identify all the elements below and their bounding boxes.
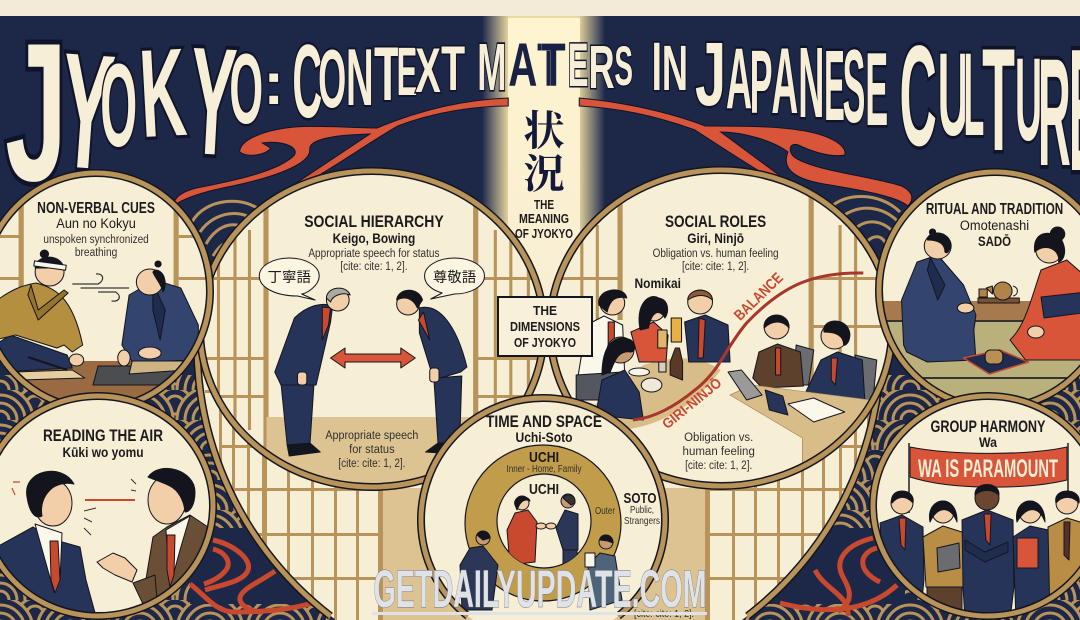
- heading: social roles: [cite: cite: 1, 2].: [682, 259, 749, 273]
- title: O: [229, 35, 263, 145]
- text: roles note: human feeling: [683, 444, 755, 458]
- label: outer uchi: [506, 449, 582, 475]
- label: soto: [624, 490, 660, 527]
- icon: wind lines: [72, 274, 129, 301]
- text: roles note: Obligation vs.: [684, 430, 753, 444]
- heading: group harmony: [930, 417, 1046, 450]
- title: C: [292, 22, 322, 139]
- figure: left man: [0, 471, 97, 620]
- heading: reading the air: [43, 426, 163, 460]
- center kanji and meaning label: 状: [524, 98, 566, 157]
- figure: woman in red: [631, 297, 668, 362]
- center glow banner: [482, 16, 605, 300]
- banner: wa is paramount: [908, 443, 1069, 513]
- title: U: [938, 29, 969, 160]
- title: S: [614, 36, 633, 98]
- ring: outer uchi: [465, 445, 621, 601]
- icon: perception lines: [12, 482, 135, 500]
- title: P: [750, 32, 772, 133]
- large outer ring arc: [197, 290, 881, 616]
- shoji backdrop inside large ring: [202, 357, 870, 620]
- text: clipped citation: [cite: cite: 1, 2].: [634, 609, 694, 620]
- title: L: [964, 29, 984, 161]
- heading: time and space: [486, 412, 602, 445]
- shoji lattice roles: [562, 197, 881, 384]
- center kanji and meaning label: THE: [534, 197, 554, 212]
- panel: non-verbal cues: [0, 169, 214, 402]
- title: A: [771, 29, 798, 134]
- heading: reading the air: Kūki wo yomu: [62, 444, 144, 460]
- heading: non-verbal cues: unspoken synchronized: [43, 232, 149, 246]
- heading: social hierarchy: [304, 211, 444, 273]
- heading: non-verbal cues: NON-VERBAL CUES: [37, 199, 155, 217]
- heading: social hierarchy: Keigo, Bowing: [333, 231, 415, 247]
- heading: social hierarchy: Appropriate speech for status: [308, 246, 440, 260]
- title: N: [662, 33, 688, 105]
- title: K: [136, 21, 189, 163]
- title: U: [1015, 33, 1042, 166]
- text: roles note: [683, 430, 755, 472]
- label: soto: SOTO: [624, 490, 657, 507]
- figure: left bowing man: [275, 288, 350, 456]
- arc: balance curve: [633, 273, 863, 420]
- text: roles note: [cite: cite: 1, 2].: [685, 458, 752, 472]
- title: E: [568, 32, 589, 100]
- icon: double arrow: [331, 348, 415, 368]
- label: outer uchi: UCHI: [529, 449, 559, 466]
- title: T: [537, 31, 562, 99]
- label: soto: Public,: [630, 505, 654, 516]
- box: the dimensions of jyokyo: OF JYOKYO: [514, 335, 576, 350]
- table: [18, 361, 158, 398]
- figure: meeting man navy: [806, 320, 878, 400]
- title: E: [397, 34, 417, 110]
- speech bubble right: [425, 258, 484, 299]
- label: inner uchi: UCHI: [529, 481, 559, 498]
- figure: woman in kimono: [1010, 227, 1080, 360]
- title: [5, 2, 1080, 222]
- title: N: [346, 33, 374, 123]
- title: R: [589, 33, 615, 101]
- panel: reading the air: [0, 392, 220, 620]
- panel: ritual and tradition: [875, 170, 1080, 415]
- floor: [266, 417, 470, 483]
- title: A: [508, 31, 537, 99]
- heading: ritual and tradition: SADŌ: [978, 232, 1011, 250]
- label: soto: Strangers: [624, 516, 660, 527]
- figure: uchi pair: [507, 494, 578, 565]
- shoji lattice non-verbal: [0, 205, 206, 288]
- icon: bottle and dishes: [629, 348, 683, 392]
- heading: social roles: Obligation vs. human feeling: [653, 246, 779, 260]
- box: the dimensions of jyokyo: THE: [533, 303, 557, 318]
- heading: non-verbal cues: [37, 199, 155, 259]
- title: T: [541, 31, 566, 99]
- center kanji and meaning label: 況: [524, 141, 564, 200]
- red swirl upper left: [174, 98, 508, 206]
- speech bubble right: 尊敬語: [433, 266, 476, 287]
- heading: reading the air: READING THE AIR: [43, 426, 163, 445]
- title: T: [982, 19, 1015, 182]
- title: Y: [185, 16, 240, 189]
- text: hierarchy note: for status: [349, 442, 395, 456]
- heading: group harmony: Wa: [979, 434, 997, 450]
- wave clusters upper: [192, 196, 902, 256]
- panel: time and space: [415, 395, 671, 620]
- shoji lattice hierarchy: [206, 206, 538, 449]
- label: nomikai: Nomikai: [635, 276, 681, 292]
- figure: team of five: [880, 484, 1080, 620]
- text: hierarchy note: Appropriate speech: [325, 428, 418, 442]
- heading: social roles: [653, 211, 779, 273]
- text: hierarchy note: [325, 428, 418, 470]
- text: hierarchy note: [cite: cite: 1, 2].: [338, 456, 405, 470]
- title: E: [865, 32, 888, 148]
- heading: ritual and tradition: [926, 200, 1063, 250]
- title: :: [263, 50, 284, 117]
- box: the dimensions of jyokyo: [498, 297, 592, 356]
- title: M: [477, 31, 507, 105]
- heading: social roles: Giri, Ninjō: [687, 231, 744, 247]
- center kanji and meaning label: [515, 98, 573, 241]
- panel: group harmony: [870, 392, 1080, 620]
- figure: right man: [97, 468, 215, 620]
- nomikai table and curve-side wash: [594, 358, 721, 429]
- title: O: [318, 32, 346, 125]
- label: outer uchi: Inner - Home, Family: [506, 464, 582, 475]
- figure: white shirt man: [576, 290, 627, 400]
- figure: seated man: [902, 229, 976, 362]
- title: T: [374, 33, 401, 117]
- heading: non-verbal cues: Aun no Kokyu: [56, 216, 136, 232]
- panel: social hierarchy: [195, 165, 555, 497]
- heading: social hierarchy: [cite: cite: 1, 2].: [340, 259, 408, 273]
- icon: laptop and tablet: [728, 370, 845, 422]
- heading: social roles: SOCIAL ROLES: [665, 211, 766, 231]
- watermark: GETDAILYUPDATE.COM: [374, 560, 706, 619]
- red swirl lower decorations: [190, 538, 897, 616]
- ring: inner uchi: [497, 474, 591, 568]
- title: N: [798, 27, 824, 138]
- title: S: [843, 29, 865, 145]
- heading: non-verbal cues: breathing: [75, 245, 117, 259]
- figure: meeting man brown: [753, 315, 814, 388]
- center kanji and meaning label: MEANING: [519, 211, 569, 226]
- figure: outer people: [460, 531, 622, 610]
- heading: time and space: TIME AND SPACE: [486, 412, 602, 431]
- tatami floor: [884, 301, 1030, 320]
- center kanji and meaning label: OF JYOKYO: [515, 226, 573, 241]
- title: A: [726, 30, 752, 126]
- figure: right bowing man: [397, 290, 467, 454]
- heading: time and space: Uchi-Soto: [516, 429, 572, 445]
- speech bubble left: 丁寧語: [268, 266, 311, 287]
- icon: teapot and tray: [964, 282, 1029, 374]
- speech bubble left: [259, 258, 319, 300]
- title: R: [1038, 27, 1071, 198]
- title: C: [899, 16, 937, 176]
- title: J: [5, 2, 67, 222]
- box: the dimensions of jyokyo: DIMENSIONS: [510, 319, 580, 334]
- figure: man with beer: [671, 290, 730, 362]
- icon: whetstone and blade: [15, 357, 186, 385]
- figure: back-view man: [596, 337, 643, 420]
- heading: social hierarchy: SOCIAL HIERARCHY: [304, 211, 444, 231]
- figure: left craftsman: [0, 250, 84, 372]
- title: Y: [54, 19, 119, 205]
- title: J: [695, 23, 726, 124]
- title: O: [100, 41, 137, 172]
- heading: ritual and tradition: Omotenashi: [960, 218, 1029, 234]
- title: I: [652, 28, 662, 105]
- wave pattern lower background: [0, 375, 1080, 620]
- figure: right craftsman: [118, 261, 198, 366]
- red swirl upper right: [579, 98, 912, 206]
- title: E: [824, 29, 845, 142]
- title: T: [441, 34, 465, 104]
- title: X: [415, 36, 441, 107]
- label: giri-ninjo: GIRI-NINJŌ: [658, 374, 725, 433]
- label: balance: BALANCE: [731, 270, 787, 324]
- label: outer: Outer: [595, 506, 616, 517]
- watermark: [372, 560, 707, 619]
- desk and floor: [730, 385, 869, 462]
- panel: social roles: [545, 170, 895, 490]
